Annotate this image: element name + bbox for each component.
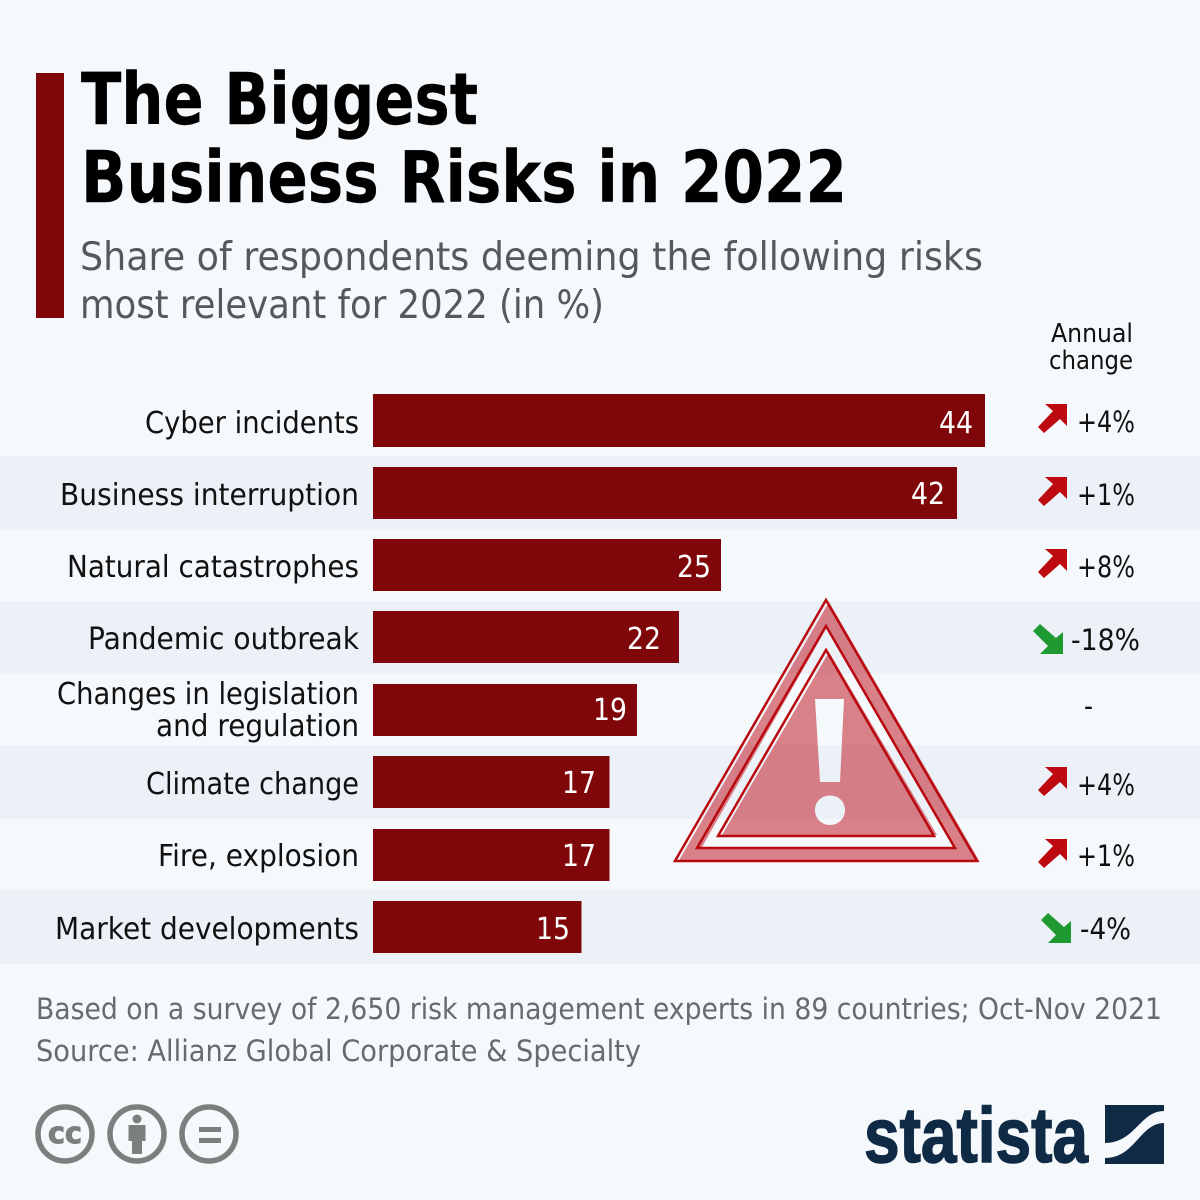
category labels: Cyber incidents [145,406,359,441]
annual change values: -18% [1071,623,1140,657]
annual change column heading: Annual [1051,319,1133,349]
annual change column heading [1049,319,1133,376]
subtitle [80,235,983,328]
annual change values: - [1084,689,1093,723]
annual change values [1071,405,1140,946]
title [81,58,847,219]
subtitle: Share of respondents deeming the following risks [80,235,983,280]
category labels [55,406,360,947]
category labels: Climate change [146,767,359,802]
title: Business Risks in 2022 [81,136,847,219]
annual change values: +4% [1077,405,1135,439]
bar values [536,406,973,947]
warning triangle icon [675,600,980,862]
bar values: 42 [911,477,945,512]
annual change values: -4% [1080,912,1131,946]
title accent bar [36,73,64,318]
category labels: Natural catastrophes [67,550,359,585]
category labels: Fire, explosion [158,839,359,874]
bar values: 19 [593,693,627,728]
bar values: 17 [562,839,596,874]
category labels: Market developments [55,912,359,947]
category labels: Business interruption [60,478,359,513]
creative commons icons [38,1107,236,1161]
footnote and source: Source: Allianz Global Corporate & Specialty [36,1034,641,1068]
footnote and source [36,992,1162,1068]
creative commons icons: cc [48,1116,82,1150]
category labels: Pandemic outbreak [88,622,360,657]
statista logo: statista [864,1091,1088,1179]
subtitle: most relevant for 2022 (in %) [80,283,604,328]
annual change values: +4% [1077,768,1135,802]
annual change column heading: change [1049,346,1133,376]
bar values: 17 [562,766,596,801]
category labels: and regulation [156,709,359,744]
annual change values: +8% [1077,550,1135,584]
annual change values: +1% [1077,478,1135,512]
title: The Biggest [81,58,478,141]
bar chart [373,394,985,953]
bar values: 22 [627,622,661,657]
trend arrows [1033,404,1071,943]
bar values: 44 [939,406,973,441]
bar values: 15 [536,912,570,947]
annual change values: +1% [1077,839,1135,873]
category labels: Changes in legislation [57,677,359,712]
bar values: 25 [677,550,711,585]
